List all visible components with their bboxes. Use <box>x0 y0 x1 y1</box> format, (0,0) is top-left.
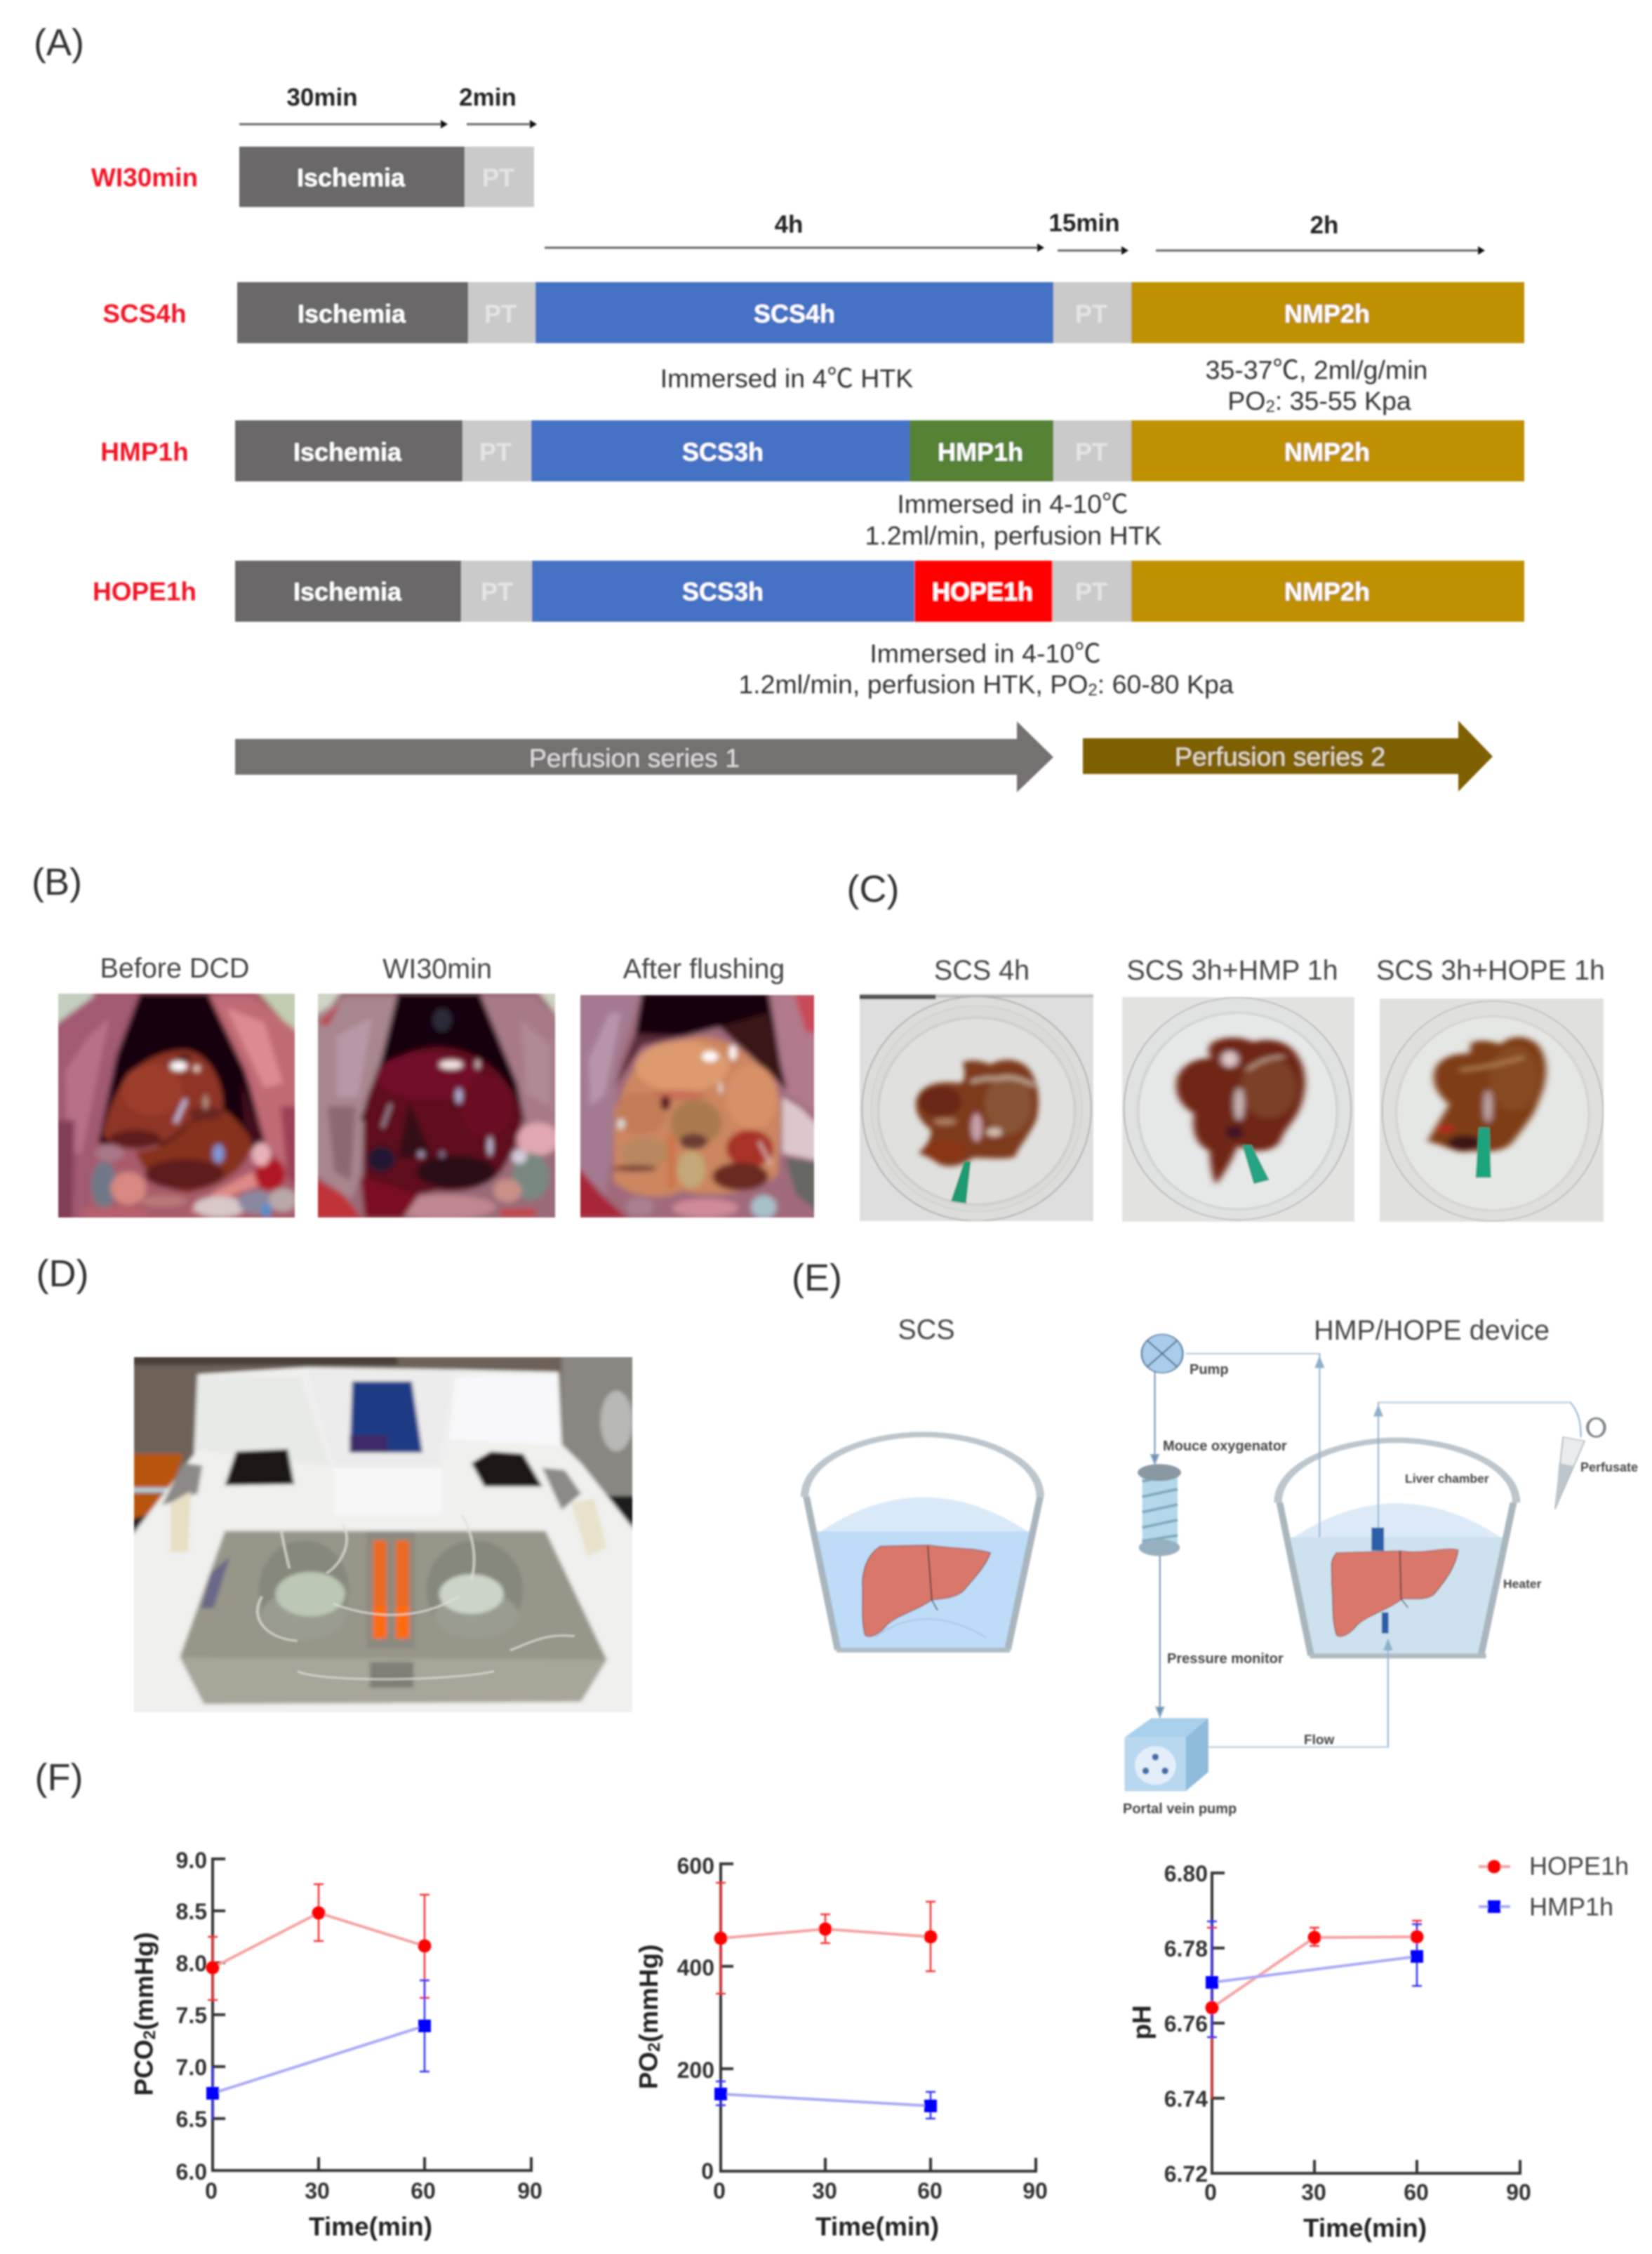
caption After flushing: After flushing <box>623 954 785 985</box>
duration arrows for warm ischemia row <box>239 84 537 128</box>
row SCS4h: SCS4h <box>102 299 187 328</box>
row WI30min: Ischemia <box>297 163 406 192</box>
line chart: pH: 6.74 <box>1164 2086 1208 2112</box>
device labels: Portal vein pump <box>1123 1801 1237 1817</box>
row HMP1h <box>100 420 1524 481</box>
heading SCS: SCS <box>898 1314 955 1345</box>
line chart: PO2: 60 <box>917 2178 942 2203</box>
HMP condition notes <box>865 489 1162 550</box>
photo: liver after WI30min <box>317 992 557 1219</box>
row WI30min: WI30min <box>91 163 198 192</box>
photo: liver after flushing <box>579 994 815 1219</box>
photo: perfusion machine <box>130 1351 639 1718</box>
row WI30min <box>91 147 534 207</box>
duration arrows for preservation rows <box>545 209 1485 255</box>
row HMP1h: Ischemia <box>293 438 402 466</box>
line chart: PO2 <box>634 1853 1048 2241</box>
line chart: PCO2: 7.5 <box>176 2003 207 2028</box>
panel label B: (B) <box>32 861 82 903</box>
row SCS4h: Ischemia <box>298 299 406 328</box>
photo: SCS 3h + HOPE 1h liver <box>1375 989 1611 1226</box>
line chart: pH: 90 <box>1506 2180 1531 2205</box>
row HOPE1h: SCS3h <box>682 577 764 606</box>
SCS condition notes: Immersed in 4℃ HTK <box>660 364 913 393</box>
line chart: PCO2: 30 <box>305 2178 330 2203</box>
panel label F: (F) <box>35 1756 83 1799</box>
HOPE condition notes: Immersed in 4-10℃ <box>870 639 1101 668</box>
line chart: pH: 30 <box>1301 2180 1326 2205</box>
line chart: PCO2: 90 <box>517 2178 542 2203</box>
line chart: PCO2: 7.0 <box>176 2055 207 2080</box>
caption WI30min: WI30min <box>382 954 492 985</box>
duration arrows for warm ischemia row: 2min <box>459 84 517 111</box>
SCS condition notes: PO <box>1227 386 1265 415</box>
HMP condition notes: Immersed in 4-10℃ <box>897 489 1128 519</box>
row HMP1h: SCS3h <box>682 438 764 466</box>
duration arrows for preservation rows: 4h <box>775 211 803 239</box>
line chart: PCO2: Time(min) <box>309 2212 432 2241</box>
line chart: PO2: 400 <box>677 1955 714 1980</box>
line chart: PO2: 600 <box>677 1853 714 1879</box>
arrow: perfusion series 2 <box>1083 721 1493 792</box>
row WI30min: PT <box>482 163 514 192</box>
panel label A: (A) <box>34 22 84 64</box>
line chart: pH: Time(min) <box>1303 2213 1427 2243</box>
device labels: Flow <box>1304 1733 1334 1747</box>
photo: liver before DCD <box>57 992 296 1219</box>
line chart: PCO2: PCO <box>129 2039 159 2096</box>
panel label C: (C) <box>847 868 899 910</box>
line chart: PCO2: 6.0 <box>176 2159 207 2185</box>
row SCS4h: SCS4h <box>754 299 835 328</box>
HOPE condition notes: 2 <box>1088 681 1098 699</box>
line chart: PCO2: (mmHg) <box>129 1932 159 2030</box>
HOPE condition notes: : 60-80 Kpa <box>1098 669 1234 699</box>
legend: HOPE1h <box>1529 1851 1629 1881</box>
line chart: pH: 6.76 <box>1164 2011 1208 2036</box>
SCS condition notes <box>660 355 1427 415</box>
line chart: PO2: 30 <box>812 2178 837 2203</box>
panel B: liver photographs in situ <box>32 861 827 1228</box>
row HMP1h: HMP1h <box>938 438 1023 466</box>
photo: SCS 3h + HMP 1h liver <box>1121 996 1355 1222</box>
device labels: Liver chamber <box>1405 1472 1489 1486</box>
legend: HMP1h <box>1529 1892 1613 1921</box>
row SCS4h <box>102 282 1524 343</box>
row SCS4h: PT <box>484 299 517 328</box>
line chart: PCO2 <box>129 1848 542 2241</box>
row HOPE1h: PT <box>481 577 513 606</box>
arrow: perfusion series 1 <box>235 721 1053 792</box>
icon: HMP/HOPE liver chamber <box>1278 1440 1517 1658</box>
row HMP1h: HMP1h <box>100 438 189 466</box>
row SCS4h: PT <box>1075 299 1107 328</box>
line chart: PO2: 0 <box>713 2178 726 2203</box>
panel label E: (E) <box>792 1257 842 1299</box>
device labels: Perfusate <box>1580 1460 1638 1474</box>
icon: SCS bucket with liver <box>805 1434 1040 1653</box>
panel F: blood gas line charts <box>35 1756 1629 2243</box>
row HOPE1h <box>93 561 1524 622</box>
row HOPE1h: Ischemia <box>293 577 402 606</box>
line chart: pH: 6.72 <box>1164 2161 1208 2187</box>
line chart: PO2: (mmHg) <box>634 1945 662 2042</box>
line chart: PCO2: 60 <box>411 2178 436 2203</box>
device labels <box>1123 1362 1638 1817</box>
panel C: explanted livers in dishes <box>847 868 1611 1226</box>
panel A: perfusion protocol timeline <box>34 22 1524 792</box>
caption Before DCD: Before DCD <box>100 953 249 984</box>
device labels: Pressure monitor <box>1167 1651 1284 1667</box>
HOPE condition notes: 1.2ml/min, perfusion HTK, PO <box>738 669 1088 699</box>
row HOPE1h: HOPE1h <box>932 577 1033 606</box>
row HOPE1h: PT <box>1075 577 1107 606</box>
line chart: pH: 6.78 <box>1164 1936 1208 1961</box>
panel D: perfusion device photograph <box>36 1253 639 1718</box>
panel label D: (D) <box>36 1253 88 1295</box>
row SCS4h: NMP2h <box>1284 299 1370 328</box>
icon: oxygenator <box>1138 1464 1181 1556</box>
SCS condition notes: 35-37℃, 2ml/g/min <box>1206 355 1427 385</box>
SCS condition notes: 2 <box>1265 397 1275 415</box>
caption SCS 3h+HOPE 1h: SCS 3h+HOPE 1h <box>1376 955 1605 986</box>
line chart: pH: pH <box>1127 2005 1157 2040</box>
row HMP1h: NMP2h <box>1284 438 1370 466</box>
icon: portal vein pump box <box>1124 1718 1208 1792</box>
HOPE condition notes <box>738 639 1234 699</box>
legend <box>1479 1851 1629 1921</box>
duration arrows for preservation rows: 15min <box>1048 209 1120 237</box>
line chart: PCO2: 6.5 <box>176 2107 207 2132</box>
line chart: PO2: Time(min) <box>815 2212 939 2241</box>
arrow: perfusion series 2: Perfusion series 2 <box>1175 742 1385 771</box>
line chart: PO2: 90 <box>1022 2178 1048 2203</box>
arrow: perfusion series 1: Perfusion series 1 <box>529 743 740 773</box>
duration arrows for warm ischemia row: 30min <box>286 84 358 111</box>
line chart: PO2: 200 <box>677 2058 714 2083</box>
caption SCS 3h+HMP 1h: SCS 3h+HMP 1h <box>1126 955 1338 986</box>
HMP condition notes: 1.2ml/min, perfusion HTK <box>865 521 1162 550</box>
photo: SCS 4h liver <box>856 989 1097 1226</box>
caption SCS 4h: SCS 4h <box>934 955 1030 986</box>
duration arrows for preservation rows: 2h <box>1310 212 1338 239</box>
line chart: pH <box>1127 1861 1531 2243</box>
row HMP1h: PT <box>479 438 512 466</box>
flow tubing and arrows <box>1151 1354 1581 1747</box>
line chart: PCO2: 0 <box>205 2178 218 2203</box>
line chart: PO2: 0 <box>701 2159 714 2184</box>
device labels: Heater <box>1503 1577 1542 1591</box>
line chart: PCO2: 8.5 <box>176 1899 207 1924</box>
line chart: pH: 60 <box>1404 2180 1429 2205</box>
row HMP1h: PT <box>1075 438 1107 466</box>
line chart: pH: 6.80 <box>1164 1861 1208 1886</box>
line chart: PCO2: 2 <box>140 2030 159 2039</box>
panel E: SCS and HMP/HOPE device schematics <box>792 1257 1638 1817</box>
line chart: PCO2: 8.0 <box>176 1951 207 1976</box>
device labels: Mouce oxygenator <box>1163 1439 1287 1454</box>
icon: pump <box>1142 1335 1183 1373</box>
line chart: pH: 0 <box>1204 2180 1217 2205</box>
row HOPE1h: HOPE1h <box>93 577 196 606</box>
row HOPE1h: NMP2h <box>1284 577 1370 606</box>
line chart: PCO2: 9.0 <box>176 1848 207 1873</box>
heading HMP/HOPE device: HMP/HOPE device <box>1314 1315 1550 1346</box>
device labels: Pump <box>1190 1362 1229 1378</box>
SCS condition notes: : 35-55 Kpa <box>1275 386 1411 415</box>
icon: perfusate tube <box>1555 1418 1605 1509</box>
line chart: PO2: 2 <box>644 2042 664 2052</box>
line chart: PO2: PO <box>634 2052 662 2089</box>
